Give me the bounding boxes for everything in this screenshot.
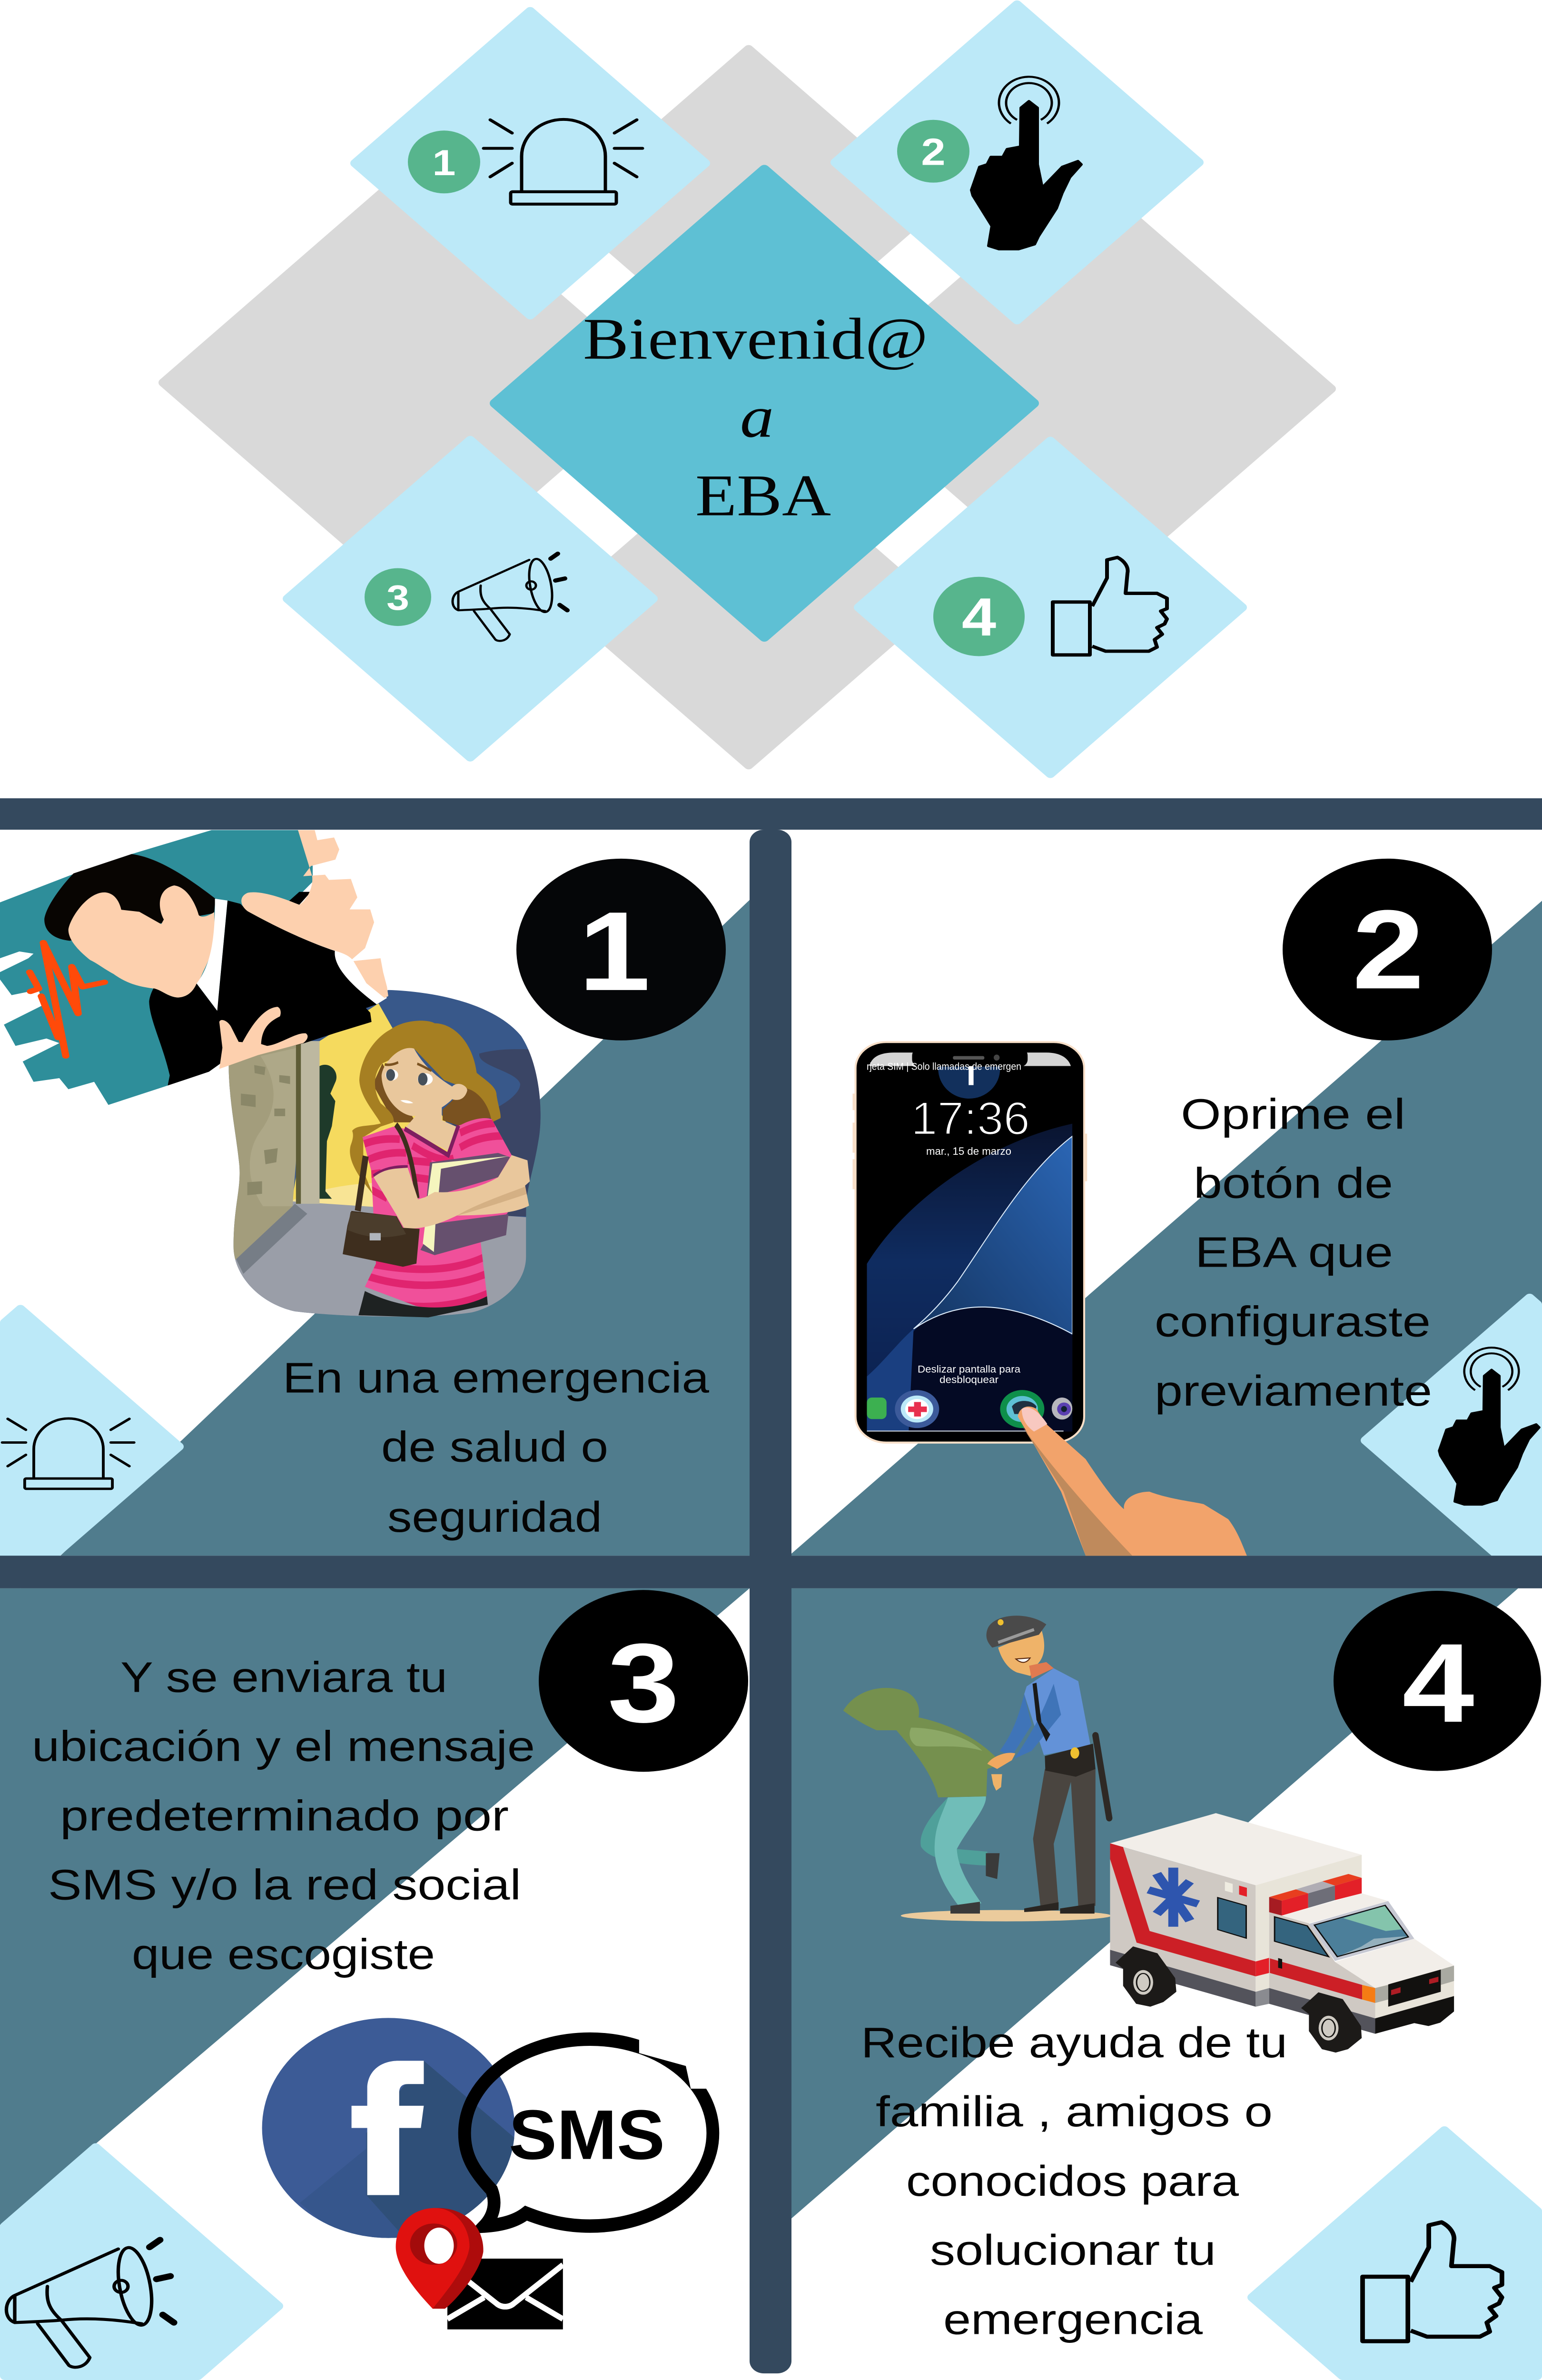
lower hand [219, 1007, 307, 1069]
ambulance body [1110, 1813, 1362, 1885]
panel 1 corner diamond [5, 1309, 179, 1584]
pulse line [30, 942, 105, 1056]
icon: pointing hand small [1439, 1348, 1539, 1505]
icon: siren [484, 119, 642, 204]
ground [901, 1910, 1111, 1921]
brush stroke backdrop [0, 830, 313, 1105]
panel 2 corner diamond [1365, 1298, 1537, 1583]
text: step 1: seguridad [387, 1493, 602, 1541]
suit [149, 901, 376, 1086]
wheels [1116, 1946, 1362, 2053]
text: step 1 [283, 1354, 710, 1541]
icon: pointing hand [971, 77, 1081, 249]
illustration: police officer arresting thief [843, 1616, 1111, 1921]
text: step 4: conocidos para [906, 2157, 1239, 2205]
cab [1269, 1912, 1375, 2018]
step badge 1: 1 [433, 142, 455, 183]
text: step 1: En una emergencia [283, 1354, 710, 1402]
illustration: man clutching chest [0, 830, 388, 1105]
illustration: frightened girl at night [228, 990, 541, 1318]
badge: number 1 [516, 859, 726, 1041]
icon: SMS bubble: SMS [509, 2095, 665, 2174]
step badge 3 [365, 568, 431, 626]
light diamond 3 [287, 440, 653, 757]
step badge 2 [897, 120, 969, 183]
badge: number 4: 4 [1402, 1620, 1474, 1745]
middle divider bar [0, 1556, 1542, 1588]
badge: number 3: 3 [607, 1620, 680, 1745]
text: step 2: Oprime el [1181, 1090, 1405, 1138]
panel 2 teal triangle [791, 901, 1542, 1556]
light diamond 2 [835, 5, 1199, 320]
step badge 1 [408, 130, 480, 193]
step badge 3: 3 [386, 578, 409, 618]
icon: siren small [2, 1418, 134, 1489]
officer [986, 1616, 1109, 1914]
text: step 3: que escogiste [132, 1930, 435, 1978]
step badge 4: 4 [962, 587, 996, 647]
phone unlock hint [918, 1363, 1021, 1385]
icon: envelope [447, 2259, 563, 2330]
icon: thumbs up [1053, 557, 1167, 655]
light diamond 4 [859, 441, 1242, 774]
badge: number 4 [1334, 1591, 1541, 1771]
text: step 2: configuraste [1155, 1298, 1431, 1346]
hand on chest [289, 892, 311, 905]
title: EBA [695, 463, 831, 528]
panel 1 teal triangle [60, 900, 750, 1556]
text: step 3 [32, 1653, 535, 1978]
text: step 4: solucionar tu [930, 2226, 1216, 2274]
phone status text: rjeta SIM | Solo llamadas de emergen [867, 1061, 1021, 1072]
badge: number 2: 2 [1352, 886, 1424, 1012]
text: step 1: de salud o [381, 1423, 608, 1471]
phone unlock hint: Deslizar pantalla para [918, 1363, 1021, 1375]
panel 4 corner diamond [1252, 2131, 1537, 2376]
text: step 2: previamente [1155, 1367, 1432, 1415]
phone date: mar., 15 de marzo [926, 1146, 1011, 1158]
badge: number 1: 1 [578, 888, 651, 1014]
text: step 3: ubicación y el mensaje [32, 1722, 535, 1770]
icon: megaphone small [6, 2240, 174, 2367]
text: step 3: predeterminado por [60, 1792, 509, 1840]
illustration: phone [852, 1039, 1247, 1556]
badge: number 3 [539, 1590, 748, 1772]
title [583, 306, 928, 528]
face [69, 885, 215, 998]
step badge 2: 2 [921, 131, 946, 173]
title: a [740, 384, 774, 449]
phone clock: 17:36 [911, 1093, 1030, 1144]
star of life [1148, 1868, 1198, 1927]
phone body [852, 1039, 1087, 1443]
illustration: ambulance [1110, 1813, 1454, 2053]
collar [197, 899, 227, 1011]
phone unlock hint: desbloquear [939, 1374, 998, 1385]
panel 3 teal triangle [0, 1588, 750, 2225]
icon: facebook [262, 2018, 521, 2241]
grey backdrop diamonds [163, 49, 1331, 765]
title: Bienvenid@ [583, 306, 928, 371]
light bar [1269, 1874, 1362, 1915]
icon: map pin [396, 2208, 484, 2309]
pointing finger [1018, 1407, 1247, 1556]
girl [343, 1021, 530, 1318]
text: step 2 [1155, 1090, 1432, 1415]
icon: megaphone [453, 554, 567, 641]
text: step 4: emergencia [943, 2295, 1203, 2343]
light diamond 1 [355, 11, 705, 315]
text: step 4 [861, 2018, 1287, 2343]
icon: thumbs up small [1363, 2222, 1502, 2341]
panel 4 teal triangle [791, 1588, 1518, 2219]
icon: SMS bubble [465, 2030, 723, 2226]
text: step 4: familia , amigos o [876, 2087, 1273, 2135]
step badge 4 [933, 577, 1025, 656]
illustration: social and SMS icons [262, 2018, 723, 2330]
central teal diamond [495, 169, 1034, 637]
text: step 2: EBA que [1195, 1228, 1393, 1276]
vertical divider bar [750, 830, 791, 2373]
badge: number 2 [1283, 859, 1492, 1041]
text: step 4: Recibe ayuda de tu [861, 2018, 1287, 2067]
text: step 3: SMS y/o la red social [48, 1861, 521, 1909]
top divider bar [0, 798, 1542, 830]
hair [44, 854, 216, 941]
night scene [228, 990, 541, 1317]
text: step 2: botón de [1194, 1159, 1393, 1207]
header: diamond cluster [163, 5, 1331, 774]
thief [843, 1688, 1002, 1914]
panel 3 corner diamond [5, 2147, 278, 2376]
text: step 3: Y se enviara tu [120, 1653, 447, 1701]
